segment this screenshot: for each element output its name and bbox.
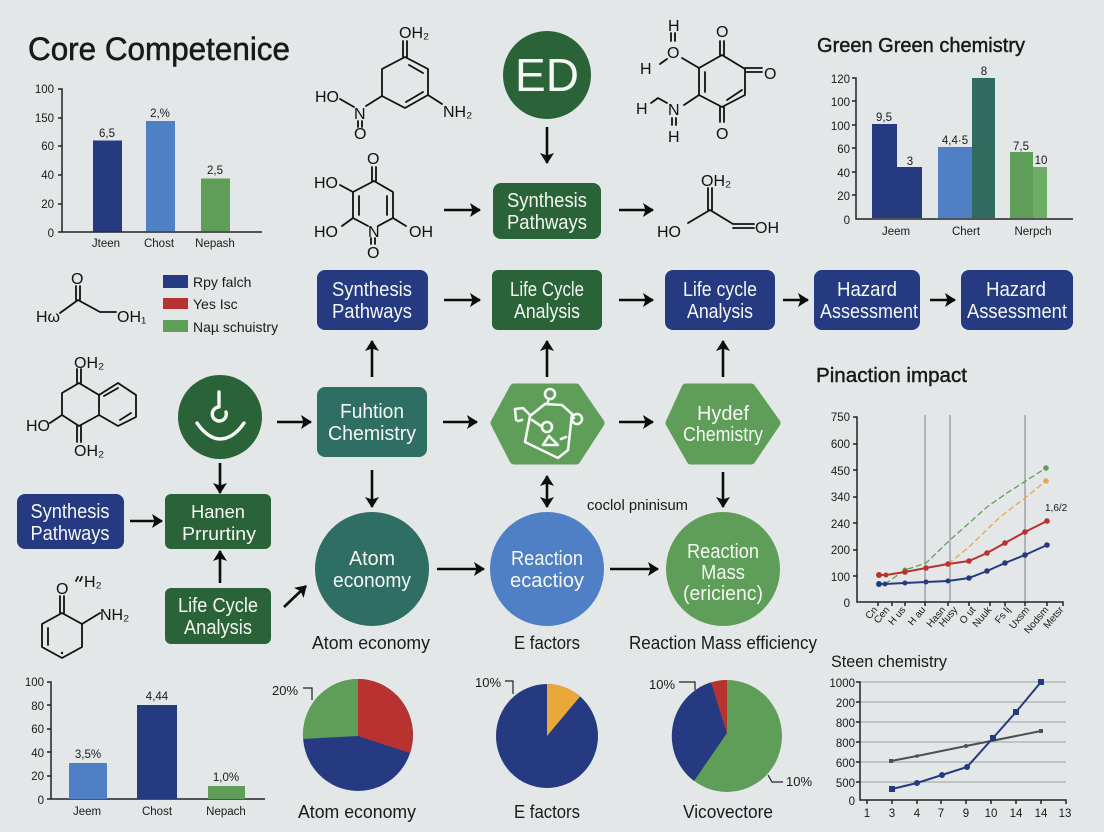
arrow: icon to hanen	[219, 463, 221, 493]
line chart: steen chemistry: 9	[963, 808, 969, 820]
bar chart: bottom left: 3,5%	[75, 749, 101, 761]
bar chart: top left: 150	[35, 113, 54, 125]
box: synthesis pathways left: Synthesis	[30, 501, 110, 523]
molecule: cyclohexenone amine: NH₂	[100, 607, 129, 624]
bar chart: top left: Jteen	[92, 238, 120, 250]
arrow: icon to fuhtion chemistry	[277, 421, 311, 423]
molecule: top centre left ring	[315, 25, 472, 143]
hexagon: hydef chemistry: Chemistry	[683, 424, 763, 446]
molecule: acid right	[657, 173, 779, 241]
arrow: atom to reaction	[437, 568, 484, 570]
box: synthesis pathways blue	[317, 270, 428, 330]
line chart: steen chemistry: 800	[836, 718, 855, 730]
line chart: pinaction impact: 750	[831, 412, 850, 424]
molecule: cyclohexenone amine: O	[56, 581, 68, 598]
molecule: top right quinone: O	[764, 66, 776, 83]
bar chart: top left: 0	[48, 228, 54, 240]
circle: reaction mass: Mass	[701, 562, 745, 584]
box: life cycle analysis green	[492, 270, 602, 330]
bar chart: bottom left: Jeem	[73, 806, 101, 818]
circle: reaction ecactioy: ecactioy	[510, 570, 584, 592]
line chart: pinaction impact: Metsr	[1042, 604, 1067, 631]
hexagon: hydef chemistry	[670, 388, 776, 460]
arrow: ED to synthesis	[546, 127, 548, 163]
molecule: formic chain left	[36, 271, 146, 326]
line chart: steen chemistry: 7	[938, 808, 944, 820]
bar chart: green chemistry: Chert	[952, 226, 981, 238]
box: hazard assessment 1	[814, 270, 920, 330]
bar chart: bottom left: 60	[31, 724, 44, 736]
arrow: hexagon to hydef	[619, 421, 653, 423]
box: hazard assessment 2: Assessment	[967, 301, 1067, 323]
line chart: pinaction impact: 240	[831, 519, 850, 531]
circle: reaction mass	[666, 512, 780, 626]
line chart: pinaction impact	[831, 412, 1068, 636]
bar chart: bottom left: Nepach	[206, 806, 246, 818]
box: life cycle analysis blue	[665, 270, 775, 330]
line chart: pinaction impact: 0	[844, 598, 850, 610]
line chart: steen chemistry: 600	[836, 758, 855, 770]
line chart: pinaction impact: H us	[887, 605, 908, 628]
arrow: synthesis to hanen	[130, 520, 162, 522]
heading: pinaction impact: Pinaction impact	[816, 365, 967, 387]
label: atom economy: Atom economy	[312, 633, 430, 653]
molecule: cyclohexenone amine	[42, 574, 129, 658]
bar chart: top left: Chost	[144, 238, 175, 250]
bar chart: top left: Nepash	[195, 238, 235, 250]
circle: reaction ecactioy	[490, 512, 604, 626]
bar chart: green chemistry: 60	[837, 144, 850, 156]
pie chart: atom economy: 20%	[272, 683, 298, 698]
bar chart: top left: 2,5	[207, 165, 223, 177]
line chart: pinaction impact: Fs lj	[993, 605, 1013, 626]
circle: atom economy	[315, 512, 429, 626]
pie chart: vicovectore: 10%	[649, 677, 675, 692]
arrow: pyridine to synthesis	[444, 209, 480, 211]
box: synthesis pathways blue: Synthesis	[332, 279, 412, 301]
pie chart: e factors	[475, 675, 598, 788]
line chart: pinaction impact: Husy	[937, 605, 960, 629]
icon circle: flask	[178, 375, 262, 459]
bar chart: top left: 6,5	[99, 128, 115, 140]
bar chart: green chemistry: 4,4·5	[942, 135, 968, 147]
box: hazard assessment 1: Hazard	[837, 279, 897, 301]
molecule: pyridine ring: HO	[314, 175, 338, 192]
arrows: row two connectors	[444, 299, 955, 301]
molecule: fused rings left: OH₂	[74, 443, 104, 460]
line chart: steen chemistry: 800	[836, 738, 855, 750]
bar chart: top left: 20	[41, 199, 54, 211]
arrow: reaction to reaction mass	[610, 568, 658, 570]
molecule: top right quinone: O	[667, 45, 679, 62]
arrow: synthesis to acid	[619, 209, 653, 211]
bar chart: green chemistry	[817, 35, 1073, 238]
box: life cycle analysis green: Life Cycle	[510, 279, 584, 301]
bar chart: bottom left: 1,0%	[213, 772, 239, 784]
box: hanen prrurtiny: Prrurtiny	[182, 524, 256, 544]
circle: reaction mass: (ericienc)	[683, 583, 763, 605]
box: hazard assessment 1: Assessment	[820, 301, 918, 323]
molecule: pyridine ring: HO	[314, 224, 338, 241]
line chart: steen chemistry: 14	[1035, 808, 1048, 820]
bar chart: top left: 100	[35, 84, 54, 96]
circle: ED: ED	[515, 49, 579, 101]
molecule: acid right: OH₂	[701, 173, 731, 190]
line chart: pinaction impact: Nuuk	[971, 604, 995, 630]
bar chart: green chemistry: 100	[831, 97, 850, 109]
legend: Rpy falch	[193, 274, 251, 290]
arrows: lower connectors	[372, 470, 723, 507]
box: fuhtion chemistry	[317, 387, 427, 457]
line chart: steen chemistry: 500	[836, 778, 855, 790]
legend	[163, 274, 278, 335]
box: hanen prrurtiny	[165, 494, 271, 549]
hexagon: hydef chemistry: Hydef	[697, 403, 749, 425]
molecule: fused rings left: HO	[26, 418, 50, 435]
bar chart: top left: 60	[41, 141, 54, 153]
box: synthesis pathways green: Pathways	[507, 212, 587, 234]
molecule: acid right: OH	[755, 220, 779, 237]
bar chart: bottom left: 4,44	[146, 691, 169, 703]
bar chart: green chemistry: Nerpch	[1014, 226, 1052, 238]
bar chart: green chemistry: 20	[837, 191, 850, 203]
label: vicovectore pie: Vicovectore	[683, 802, 773, 822]
hexagon icon: molecule	[495, 388, 600, 460]
box: life cycle analysis left	[165, 588, 271, 644]
bar chart: top left: 2,%	[150, 108, 170, 120]
circle: reaction ecactioy: Reaction	[511, 548, 583, 570]
bar chart: top left: 40	[41, 170, 54, 182]
line chart: pinaction impact: 100	[831, 572, 850, 584]
box: life cycle analysis left: Analysis	[184, 617, 252, 639]
circle: ED	[503, 31, 591, 119]
box: hazard assessment 2: Hazard	[986, 279, 1046, 301]
molecule: formic chain left: O	[71, 271, 83, 288]
bar chart: bottom left: 40	[31, 748, 44, 760]
box: hazard assessment 2	[961, 270, 1073, 330]
bar chart: green chemistry: 7,5	[1013, 141, 1029, 153]
molecule: top centre left ring: HO	[315, 89, 339, 106]
molecule: top right quinone	[636, 18, 776, 146]
molecule: pyridine ring	[314, 151, 433, 262]
line chart: pinaction impact: 450	[831, 466, 850, 478]
legend: Yes Isc	[193, 296, 238, 312]
pie chart: e factors: 10%	[475, 675, 501, 690]
box: synthesis pathways blue: Pathways	[332, 301, 412, 323]
bar chart: green chemistry: 100	[831, 121, 850, 133]
bar chart: bottom left	[25, 677, 265, 818]
bar chart: bottom left: 80	[31, 701, 44, 713]
line chart: steen chemistry: 10	[985, 808, 997, 820]
bar chart: green chemistry: 40	[837, 168, 850, 180]
molecule: pyridine ring: O	[367, 151, 379, 168]
line chart: pinaction impact: Cn	[864, 605, 880, 622]
title: Core Competenice	[28, 31, 290, 67]
molecule: pyridine ring: OH	[409, 224, 433, 241]
molecule: top right quinone: H	[636, 101, 648, 118]
molecule: top centre left ring: OH₂	[399, 25, 429, 42]
line chart: pinaction impact: Hasn	[925, 605, 948, 630]
arrow: life cycle to hanen	[219, 551, 221, 583]
caption: coclol pninisum: coclol pninisum	[587, 498, 688, 514]
molecule: fused rings left	[26, 355, 136, 460]
molecule: top right quinone: H	[668, 129, 680, 146]
bar chart: green chemistry: 8	[981, 66, 987, 78]
label: atom economy pie: Atom economy	[298, 802, 416, 822]
molecule: top right quinone: O	[716, 24, 728, 41]
bar chart: top left	[35, 84, 262, 250]
molecule: top centre left ring: NH₂	[443, 104, 472, 121]
bar chart: green chemistry: 3	[907, 156, 913, 168]
label: reaction mass efficiency: Reaction Mass efficiency	[629, 633, 817, 653]
bar chart: green chemistry: 0	[844, 215, 850, 227]
molecule: pyridine ring: O	[367, 245, 379, 262]
molecule: top right quinone: N	[668, 102, 680, 119]
circle: atom economy: economy	[333, 570, 411, 592]
molecule: top right quinone: O	[716, 126, 728, 143]
box: life cycle analysis blue: Life cycle	[683, 279, 757, 301]
bar chart: green chemistry: 120	[831, 74, 850, 86]
line chart: pinaction impact: 600	[831, 439, 850, 451]
line chart: steen chemistry: 1	[864, 808, 870, 820]
line chart: steen chemistry: 13	[1059, 808, 1071, 820]
box: hanen prrurtiny: Hanen	[191, 502, 245, 522]
box: life cycle analysis blue: Analysis	[687, 301, 753, 323]
bar chart: bottom left: 0	[38, 795, 44, 807]
line chart: pinaction impact: 200	[831, 545, 850, 557]
line chart: steen chemistry: 3	[889, 808, 895, 820]
pie chart: vicovectore	[649, 677, 812, 792]
molecule: acid right: HO	[657, 224, 681, 241]
line chart: steen chemistry: 1000	[829, 678, 855, 690]
heading: steen chemistry: Steen chemistry	[831, 653, 948, 671]
pie chart: atom economy	[272, 679, 413, 791]
bar chart: green chemistry: 9,5	[876, 112, 892, 124]
arrow: fuhtion to hexagon	[443, 421, 477, 423]
molecule: top right quinone: H	[640, 61, 652, 78]
pie chart: vicovectore: 10%	[786, 774, 812, 789]
box: synthesis pathways left: Pathways	[30, 523, 110, 545]
line chart: steen chemistry	[829, 653, 1071, 820]
line chart: pinaction impact: O ut	[958, 605, 978, 626]
bar chart: bottom left: 100	[25, 677, 44, 689]
box: fuhtion chemistry: Fuhtion	[340, 401, 404, 423]
line chart: pinaction impact: 1,6/2	[1045, 503, 1068, 514]
label: e factors pie: E factors	[514, 802, 580, 822]
circle: atom economy: Atom	[349, 548, 395, 570]
molecule: top right quinone: H	[668, 18, 680, 35]
bar chart: green chemistry: 10	[1035, 155, 1047, 167]
line chart: pinaction impact: Nodsm	[1023, 605, 1051, 636]
bar chart: bottom left: 20	[31, 771, 44, 783]
bar chart: bottom left: Chost	[142, 806, 173, 818]
line chart: pinaction impact: 340	[831, 492, 850, 504]
molecule: top centre left ring: N	[354, 106, 366, 123]
bar chart: green chemistry: Jeem	[882, 226, 910, 238]
box: synthesis pathways green	[493, 183, 601, 239]
molecule: top centre left ring: O	[354, 126, 366, 143]
box: synthesis pathways green: Synthesis	[507, 190, 587, 212]
molecule: pyridine ring: N	[368, 224, 380, 241]
molecule: fused rings left: OH₂	[74, 355, 104, 372]
box: synthesis pathways left	[17, 494, 124, 549]
molecule: formic chain left: OH₁	[117, 309, 146, 326]
arrows: upward connectors	[372, 341, 723, 377]
line chart: steen chemistry: 4	[914, 808, 921, 820]
line chart: pinaction impact: H au	[906, 605, 928, 628]
box: life cycle analysis green: Analysis	[514, 301, 580, 323]
line chart: steen chemistry: 200	[836, 698, 855, 710]
line chart: steen chemistry: 14	[1010, 808, 1023, 820]
label: e factors: E factors	[514, 633, 580, 653]
molecule: cyclohexenone amine: H₂	[84, 574, 102, 591]
arrow: life cycle to atom economy	[284, 586, 306, 607]
circle: reaction mass: Reaction	[687, 541, 759, 563]
box: fuhtion chemistry: Chemistry	[328, 423, 416, 445]
legend: Naµ schuistry	[193, 319, 278, 335]
line chart: pinaction impact: Uxsm	[1007, 605, 1032, 632]
box: life cycle analysis left: Life Cycle	[178, 595, 258, 617]
heading: green chemistry: Green Green chemistry	[817, 35, 1025, 57]
line chart: pinaction impact: Cen	[872, 605, 892, 626]
molecule: formic chain left: Hω	[36, 309, 60, 326]
line chart: steen chemistry: 0	[849, 796, 855, 808]
